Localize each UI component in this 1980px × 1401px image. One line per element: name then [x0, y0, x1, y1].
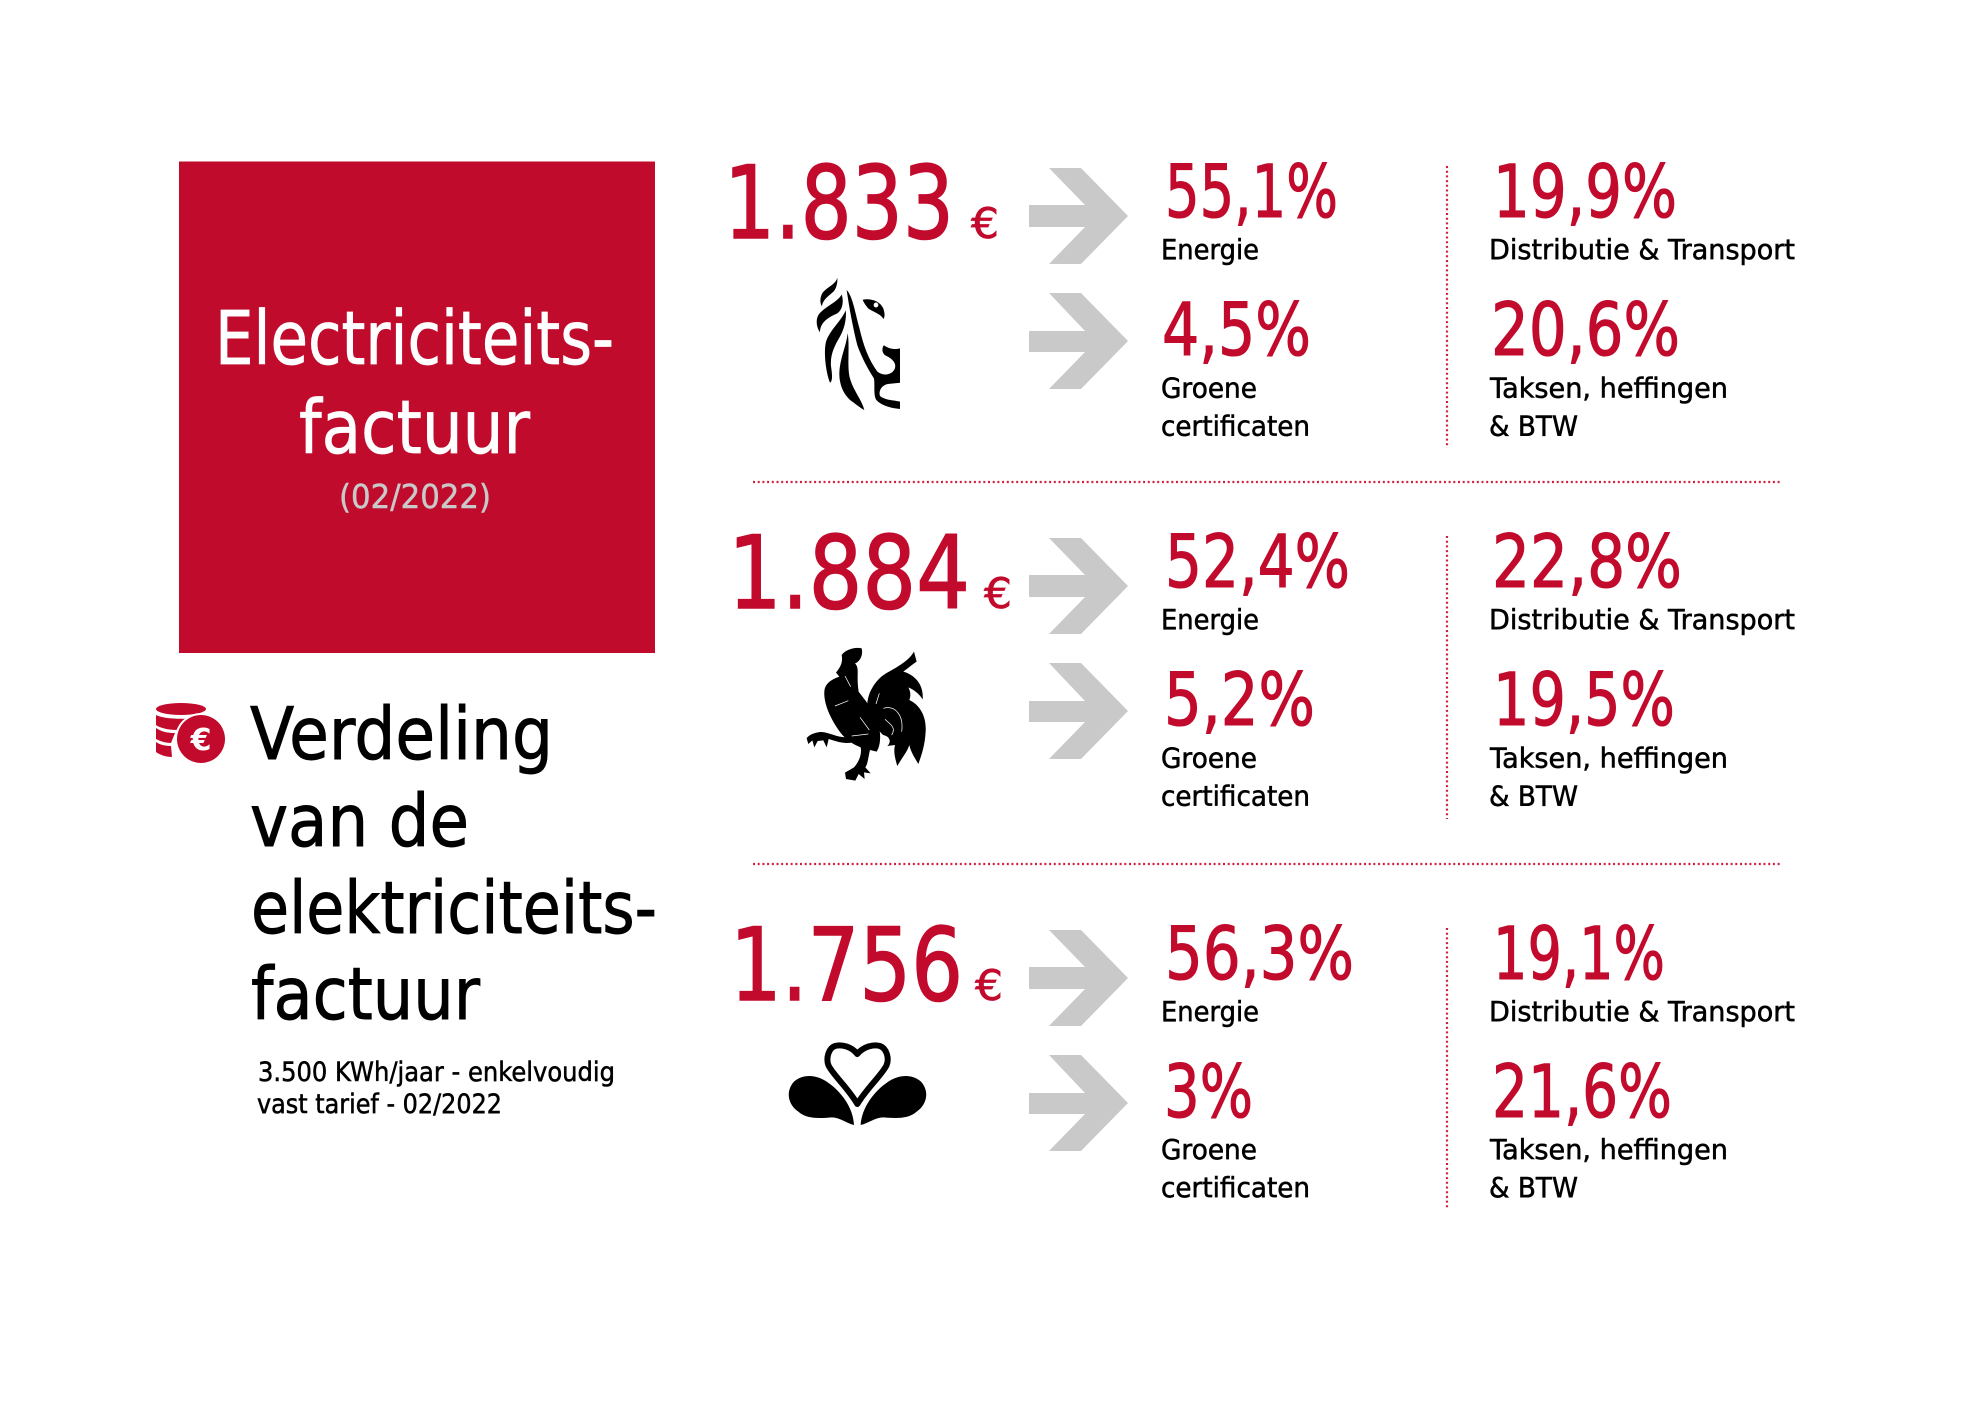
icon: Brussels iris [789, 1045, 926, 1125]
panel: title block [179, 162, 655, 653]
subtitle: consumption note: 3.500 KWh/jaar - enkelvoudig [258, 1057, 615, 1088]
total amount Wallonië: 1.884 [728, 514, 970, 632]
heading: Verdeling van de elektriciteitsfactuur [250, 692, 657, 1036]
stat: Distributie & Transport: Distributie & Transport [1489, 234, 1795, 266]
stat: Distributie & Transport: 19,9% [1493, 150, 1677, 235]
stat: Taksen, heffingen & BTW: & BTW [1489, 410, 1578, 442]
stat: Energie: 52,4% [1165, 520, 1350, 605]
arrow [1029, 1055, 1128, 1151]
total amount Brussel: € [975, 961, 1003, 1010]
stat: Groene certificaten [1161, 658, 1315, 812]
arrow [1029, 663, 1128, 759]
icon: Walloon rooster [807, 648, 926, 781]
total amount Vlaanderen: 1.833 [724, 144, 954, 262]
stat: Taksen, heffingen & BTW: Taksen, heffingen [1489, 372, 1728, 404]
panel: Vlaanderen [724, 144, 1795, 448]
stat: Energie: 56,3% [1165, 912, 1354, 997]
icon: Flemish lion [817, 278, 900, 410]
stat: Taksen, heffingen & BTW: 19,5% [1493, 658, 1675, 743]
stat: Energie: 55,1% [1165, 150, 1338, 235]
stat: Distributie & Transport: 19,1% [1493, 912, 1665, 997]
stat: Groene certificaten [1161, 1050, 1310, 1204]
heading: Electriciteitsfactuur [215, 296, 614, 471]
heading: Verdeling van de elektriciteitsfactuur: Verdeling [250, 692, 553, 776]
stat: Distributie & Transport: 22,8% [1492, 520, 1682, 605]
stat: Energie: Energie [1161, 996, 1259, 1028]
arrow [1029, 538, 1128, 634]
heading: Electriciteitsfactuur: factuur [299, 385, 530, 471]
subtitle: consumption note [257, 1057, 615, 1120]
stat: Groene certificaten: Groene [1161, 372, 1257, 404]
stat: Taksen, heffingen & BTW: Taksen, heffingen [1489, 742, 1728, 774]
stat: Groene certificaten [1161, 288, 1311, 442]
date label: (02/2022) [339, 477, 491, 516]
stat: Taksen, heffingen & BTW [1489, 288, 1728, 442]
stat: Groene certificaten: Groene [1161, 742, 1257, 774]
arrow [1029, 293, 1128, 389]
stat: Distributie & Transport: Distributie & Transport [1489, 996, 1795, 1028]
stat: Groene certificaten: Groene [1161, 1134, 1257, 1166]
heading: Verdeling van de elektriciteitsfactuur: factuur [251, 952, 480, 1036]
stat: Energie [1161, 912, 1354, 1028]
total amount Brussel: 1.756 [730, 906, 963, 1024]
stat: Groene certificaten: certificaten [1161, 410, 1310, 442]
arrow [1029, 168, 1128, 264]
stat: Groene certificaten: 4,5% [1162, 288, 1311, 373]
arrow [1029, 930, 1128, 1026]
icon: euro coins: € [190, 723, 211, 758]
stat: Taksen, heffingen & BTW [1489, 1050, 1728, 1204]
stat: Energie [1161, 150, 1338, 266]
stat: Taksen, heffingen & BTW: Taksen, heffingen [1489, 1134, 1728, 1166]
heading: Electriciteitsfactuur: Electriciteits- [215, 296, 614, 382]
stat: Distributie & Transport [1489, 520, 1795, 636]
heading: Verdeling van de elektriciteitsfactuur: elektriciteits- [251, 866, 657, 950]
stat: Taksen, heffingen & BTW: & BTW [1489, 780, 1578, 812]
stat: Groene certificaten: certificaten [1161, 1172, 1310, 1204]
stat: Energie: Energie [1161, 234, 1259, 266]
stat: Groene certificaten: certificaten [1161, 780, 1310, 812]
stat: Energie [1161, 520, 1350, 636]
stat: Groene certificaten: 5,2% [1164, 658, 1315, 743]
stat: Taksen, heffingen & BTW: & BTW [1489, 1172, 1578, 1204]
stat: Taksen, heffingen & BTW: 20,6% [1491, 288, 1680, 373]
stat: Distributie & Transport [1489, 150, 1795, 266]
total amount Wallonië: € [984, 569, 1012, 618]
stat: Energie: Energie [1161, 604, 1259, 636]
panel: Wallonië [728, 514, 1795, 819]
icon: euro coins [156, 703, 227, 765]
stat: Distributie & Transport: Distributie & Transport [1489, 604, 1795, 636]
total amount Vlaanderen: € [971, 199, 999, 248]
subtitle: consumption note: vast tarief - 02/2022 [257, 1089, 502, 1120]
stat: Groene certificaten: 3% [1164, 1050, 1253, 1135]
stat: Taksen, heffingen & BTW [1489, 658, 1728, 812]
panel: Brussel [730, 906, 1795, 1210]
heading: Verdeling van de elektriciteitsfactuur: van de [250, 779, 469, 863]
stat: Taksen, heffingen & BTW: 21,6% [1492, 1050, 1672, 1135]
stat: Distributie & Transport [1489, 912, 1795, 1028]
